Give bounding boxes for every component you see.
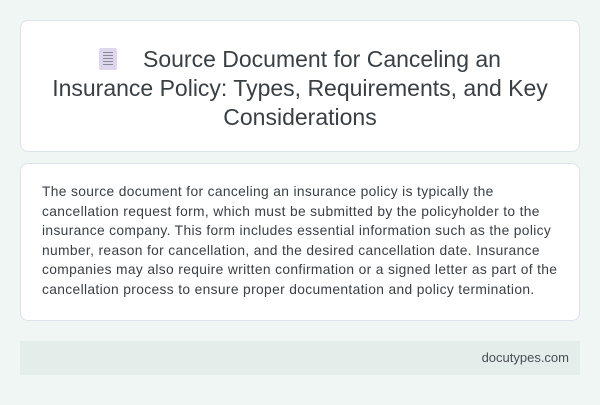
text block: The source document for canceling an insurance policy is typically the: [42, 184, 494, 199]
text block: insurance company. This form includes essential information such as the policy: [42, 223, 551, 238]
icon: document: [99, 48, 117, 70]
text block: [42, 184, 557, 297]
title: Insurance Policy: Types, Requirements, and Key: [52, 75, 548, 101]
title: Considerations: [223, 104, 377, 130]
footer text: docutypes.com: [482, 350, 569, 365]
footer: [20, 341, 580, 375]
title: [52, 46, 548, 130]
panel: title card: [20, 20, 580, 152]
text block: companies may also require written confirmation or a signed letter as part of the: [42, 262, 557, 277]
text block: cancellation process to ensure proper documentation and policy termination.: [42, 282, 535, 296]
title: Source Document for Canceling an: [143, 46, 501, 72]
panel: description: [20, 163, 580, 321]
text block: number, reason for cancellation, and the desired cancellation date. Insurance: [42, 242, 540, 258]
text block: cancellation request form, which must be submitted by the policyholder to the: [42, 204, 540, 218]
